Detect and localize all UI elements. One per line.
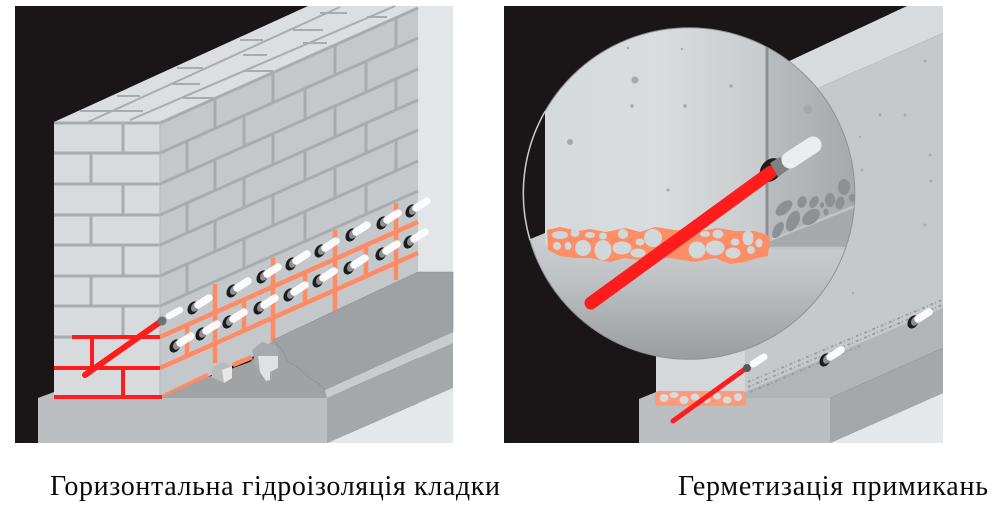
concrete ledge top: [273, 272, 453, 390]
orange injection grid on the wall side: [160, 203, 418, 398]
gravel seam: [748, 300, 942, 392]
dark background: [504, 6, 943, 443]
rubble floor: [160, 340, 345, 398]
concrete wall: [700, 33, 943, 398]
small orange band: [655, 391, 746, 406]
sphere dark corner: [527, 225, 545, 239]
broken masonry blocks: [212, 342, 279, 383]
sphere rear wall: [545, 25, 767, 245]
concrete specks: [567, 47, 812, 191]
ledge side: [830, 348, 943, 443]
panel: horizontal masonry waterproofing: [15, 6, 453, 443]
corner line: [766, 40, 768, 236]
red injection lines on front face: [54, 337, 162, 397]
panel: junction sealing: [504, 6, 943, 443]
ledge front: [639, 392, 830, 443]
light floor wedge: [830, 393, 943, 443]
light side strip: [418, 6, 453, 443]
sphere floor: [530, 233, 828, 359]
magnifier sphere: [520, 25, 860, 361]
sphere side floor band: [768, 210, 854, 248]
sphere orange band: [547, 227, 770, 264]
light floor wedge: [327, 388, 453, 443]
caption: junction sealing: Герметизація примикань: [678, 471, 988, 502]
ledge light edge: [325, 332, 453, 398]
light seam lines: [768, 205, 858, 248]
wall specks: [852, 60, 932, 294]
injection pins: lower row: [167, 232, 425, 355]
sphere left rim highlight: [523, 112, 545, 240]
ledge side: [327, 343, 453, 443]
small column: [656, 350, 745, 398]
brick wall: [54, 6, 418, 398]
sphere side wall: [768, 48, 854, 239]
sphere outline: [523, 28, 855, 359]
injection tube: [85, 310, 180, 375]
gravel stones: [770, 179, 855, 240]
top beam: [770, 6, 943, 96]
caption: horizontal masonry waterproofing: Горизонтальна гідроізоляція кладки: [50, 471, 500, 502]
dark background: [15, 6, 453, 443]
injection pins: upper row: [185, 201, 427, 317]
seam pins: [817, 312, 929, 369]
large injection tube: [591, 145, 813, 303]
ledge top: [745, 308, 943, 398]
ledge front: [38, 392, 327, 443]
small injection tube: [673, 357, 764, 421]
